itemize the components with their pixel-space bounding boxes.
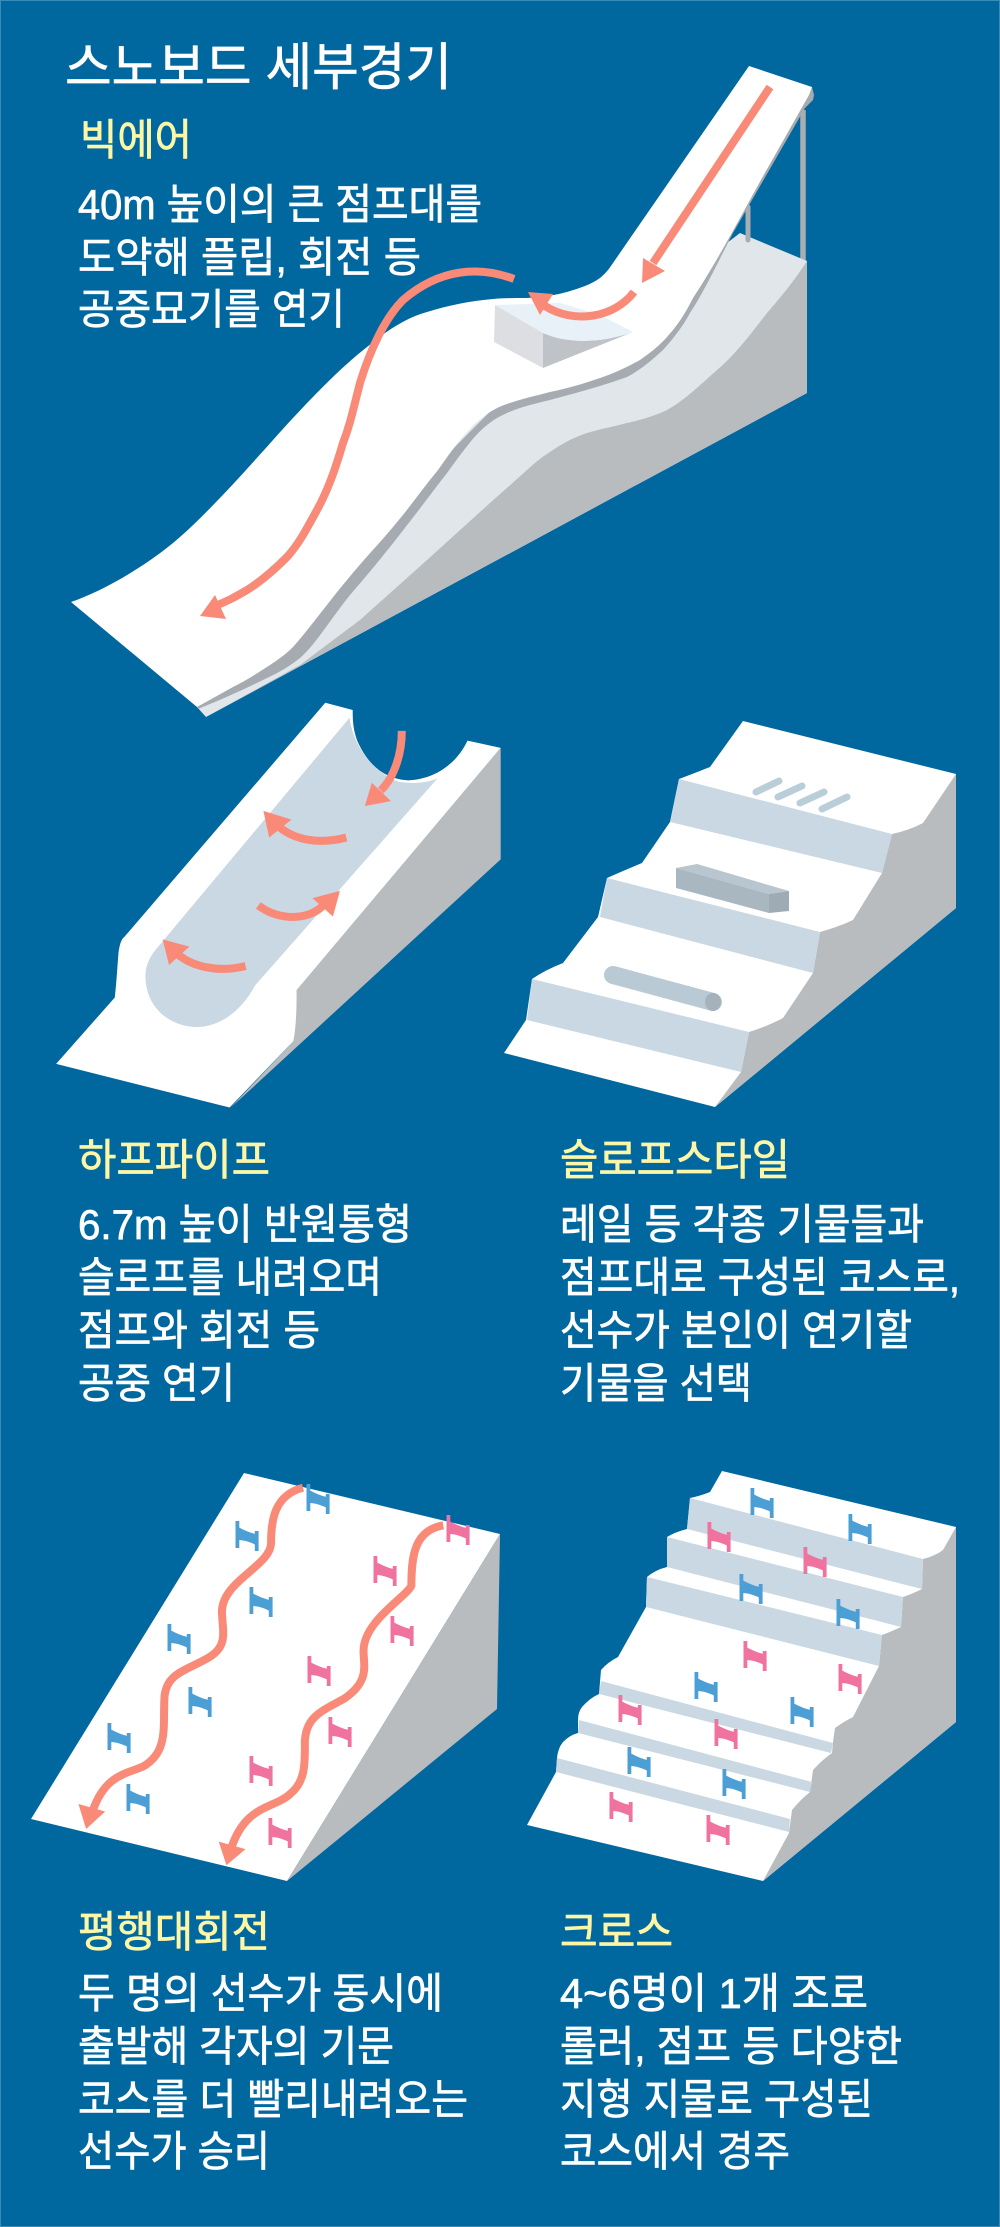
box obstacle — [676, 864, 789, 913]
jump box — [494, 303, 633, 368]
course dark side — [763, 1527, 956, 1881]
description: 4~6명이 1개 조로 — [560, 1970, 868, 2017]
description — [78, 181, 482, 333]
description: 도약해 플립, 회전 등 — [78, 234, 421, 281]
arrow: takeoff — [528, 292, 634, 317]
illustration: slopestyle course — [504, 721, 956, 1107]
title: 스노보드 세부경기 — [65, 39, 452, 96]
description — [78, 1970, 468, 2175]
arrow: left wall lower — [163, 939, 246, 969]
arrow: landing — [200, 271, 514, 619]
short ramp support — [746, 207, 750, 240]
description: 두 명의 선수가 동시에 — [78, 1970, 443, 2017]
slope dark side — [287, 1534, 500, 1881]
panel: halfpipe — [56, 703, 501, 1407]
ramp snow surface — [71, 66, 812, 707]
ramp light side — [197, 233, 807, 717]
illustration: big air ramp — [71, 66, 814, 717]
description: 선수가 승리 — [78, 2128, 270, 2175]
illustration: halfpipe — [56, 703, 501, 1108]
description — [78, 1201, 412, 1407]
ramp dark side — [206, 261, 807, 717]
pipe snow — [56, 703, 501, 1108]
description: 슬로프를 내려오며 — [78, 1254, 382, 1301]
rollers — [556, 1498, 923, 1832]
panel: parallel giant slalom — [31, 1473, 500, 2175]
description: 6.7m 높이 반원통형 — [78, 1201, 412, 1248]
course dark side — [715, 774, 956, 1107]
pipe dark side — [231, 748, 501, 1108]
jib rails — [756, 781, 847, 809]
steps — [527, 779, 892, 1072]
course snow — [527, 1471, 956, 1881]
panel: big air — [71, 66, 814, 717]
pipe floor — [145, 718, 438, 1027]
arrow: drop in — [365, 731, 402, 806]
description — [560, 1201, 960, 1407]
arrow: left wall — [263, 811, 346, 841]
pink gates — [250, 1515, 470, 1848]
description: 공중묘기를 연기 — [78, 286, 345, 333]
arrow: right run — [219, 1525, 443, 1865]
arrow: inrun — [642, 87, 770, 283]
course snow — [504, 721, 956, 1107]
slope snow — [31, 1473, 500, 1881]
description: 점프대로 구성된 코스로, — [560, 1254, 960, 1301]
description — [560, 1970, 902, 2175]
panel: slopestyle — [504, 721, 960, 1407]
ramp edge strip — [197, 87, 814, 709]
description: 선수가 본인이 연기할 — [560, 1307, 912, 1354]
description: 롤러, 점프 등 다양한 — [560, 2023, 902, 2070]
arrow: left run — [78, 1488, 303, 1829]
arrows: slalom runs — [78, 1488, 443, 1865]
panel: cross — [527, 1471, 956, 2175]
heading: 슬로프스타일 — [560, 1137, 790, 1185]
description: 공중 연기 — [78, 1360, 235, 1407]
description: 코스에서 경주 — [560, 2128, 790, 2175]
heading: 평행대회전 — [78, 1909, 270, 1957]
description: 점프와 회전 등 — [78, 1307, 320, 1354]
description: 출발해 각자의 기문 — [78, 2023, 394, 2070]
arrow: right wall — [258, 891, 340, 917]
blue gates — [628, 1488, 872, 1799]
long ramp support — [800, 110, 806, 261]
blue gates — [108, 1484, 330, 1814]
description: 레일 등 각종 기물들과 — [560, 1201, 924, 1248]
heading: 크로스 — [560, 1909, 673, 1957]
rail obstacle — [613, 975, 721, 1011]
pink gates — [610, 1522, 862, 1845]
illustration: snowboard cross course — [527, 1471, 956, 1881]
description: 기물을 선택 — [560, 1360, 752, 1407]
description: 코스를 더 빨리내려오는 — [78, 2076, 468, 2123]
heading: 하프파이프 — [78, 1137, 270, 1185]
heading: 빅에어 — [80, 117, 192, 165]
description: 지형 지물로 구성된 — [560, 2076, 873, 2123]
illustration: parallel slalom slope — [31, 1473, 500, 1881]
description: 40m 높이의 큰 점프대를 — [78, 181, 482, 228]
